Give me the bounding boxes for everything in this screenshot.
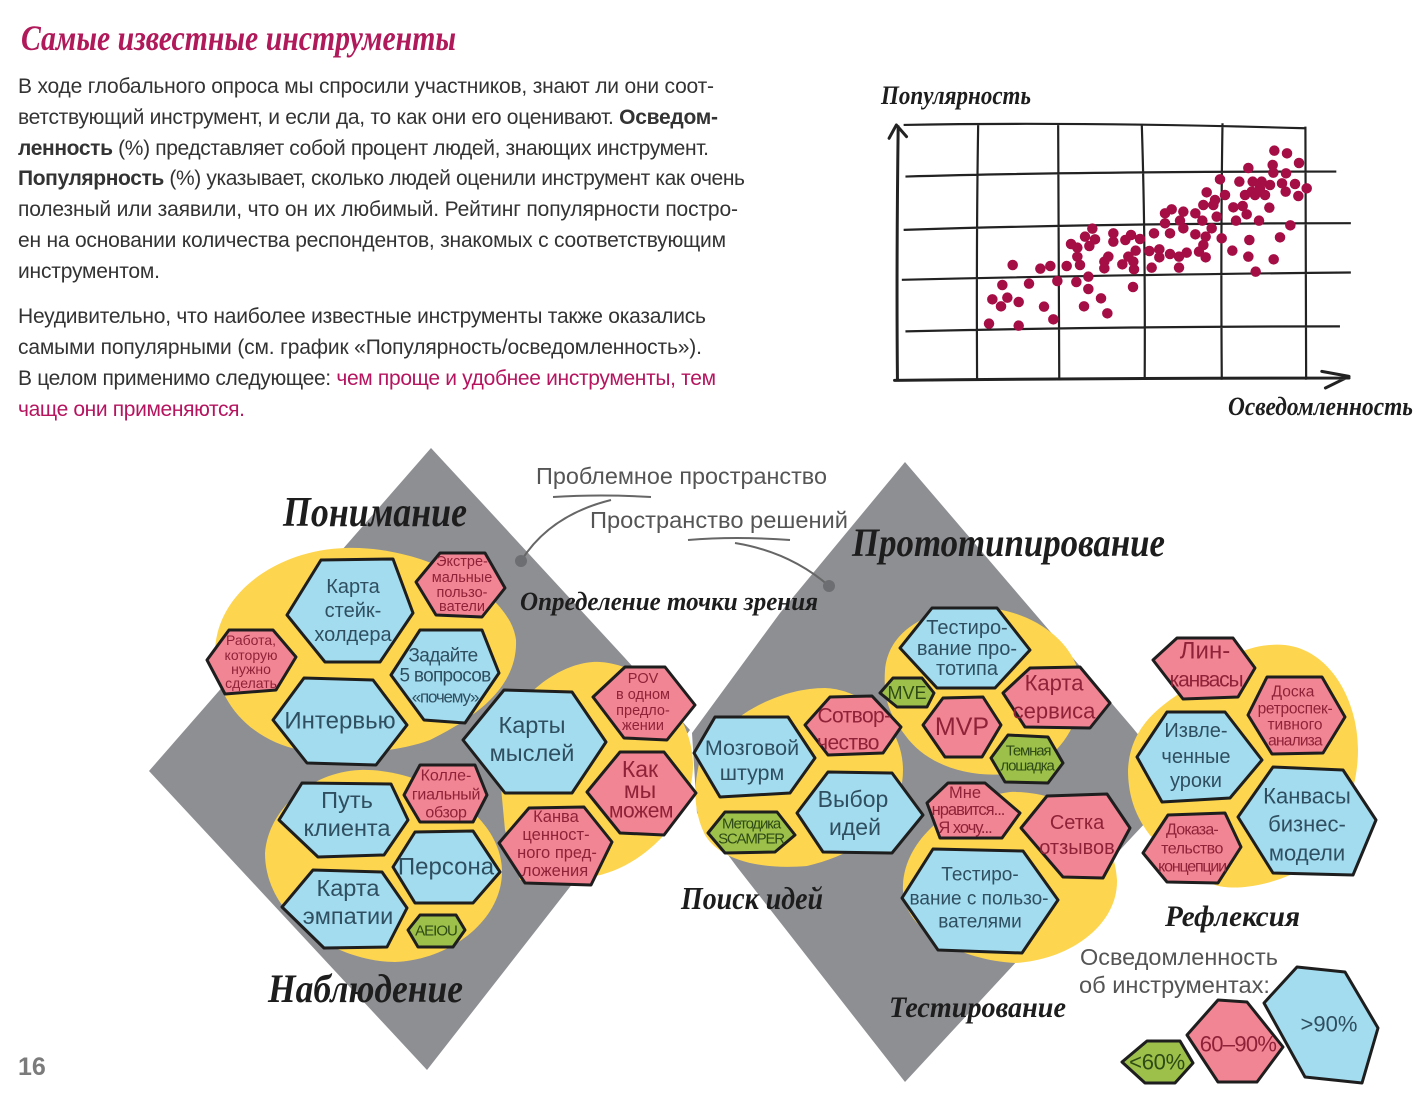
hex: interview [273,678,407,765]
hex: lean canvas [1153,638,1255,699]
hex: co-creation: Сотвор- [817,704,891,728]
legend title [1079,944,1278,998]
hex: feedback grid: Сетка [1050,812,1105,834]
hex: jobs to be done: нужно [231,661,271,677]
hex: peer review: Колле- [421,768,471,784]
hex: user testing: Тестиро- [941,864,1019,886]
annotation: solution space [590,507,848,592]
hex: idea selection: идей [829,814,881,840]
heading: reflection: Рефлексия [1164,900,1300,933]
hex: how might we: мы [624,777,656,803]
hex: empathy map: эмпатии [303,903,393,929]
hex: lessons learned: уроки [1170,770,1222,792]
hex: five whys: 5 вопросов [399,666,491,686]
hex: dark horse: лошадка [1000,758,1055,774]
heading: ideation: Поиск идей [680,880,823,916]
hex: user testing: вание с пользо- [910,888,1048,910]
blob: reflection [1128,645,1358,888]
hex: MVP [923,697,1001,757]
panel: solution space diamond [692,462,1180,1082]
hex: retrospective board [1248,677,1345,754]
legend item: 60 to 90 percent: 60–90% [1200,1032,1276,1056]
hex: brainstorming: штурм [720,761,784,785]
legend title: об инструментах: [1079,972,1270,998]
hex: stakeholder map: Карта [326,576,381,598]
hex: user testing: вателями [938,912,1022,932]
hex: stakeholder map: стейк- [325,600,381,622]
chart axis label: awareness: Осведомленность [1228,392,1413,421]
hex: dark horse [991,735,1063,783]
hex: value proposition canvas [499,807,612,885]
hex: extreme users: мальные [432,570,492,586]
hex: empathy map [282,870,407,948]
hex: feedback grid [1021,794,1130,878]
hex: stakeholder map: холдера [314,624,392,646]
text block: conclusion paragraph: В целом применимо следующее: чем проще и удобнее инструменты, тем [18,367,716,390]
hex: business model canvas [1238,767,1376,875]
hex: five whys: «почему» [412,688,479,706]
hex: lean canvas: канвасы [1170,668,1242,692]
hex: jobs to be done: которую [225,647,277,663]
hex: co-creation: чество [817,732,879,754]
heading: prototyping: Прототипирование [851,520,1165,565]
hex: value proposition canvas: ценност- [522,826,590,844]
hex: business model canvas: модели [1269,840,1345,866]
hex: AEIOU [408,915,465,947]
blob: understanding [215,548,516,753]
hex: co-creation [805,696,901,755]
text block: conclusion paragraph: Неудивительно, что наиболее известные инструменты также оказались [18,305,706,328]
hex: user testing [902,849,1058,953]
hex: POV [593,667,695,740]
text block: conclusion paragraph [18,305,716,421]
hex: service map: сервиса [1013,698,1096,724]
text block: intro paragraph: ен на основании количества респондентов, знакомых с соответствующим [18,229,726,252]
heading: testing: Тестирование [889,991,1066,1024]
hex: lean canvas: Лин- [1180,638,1230,664]
hex: I like I wish: Я хочу... [938,819,992,837]
heading: understanding: Понимание [282,490,467,536]
text block: intro paragraph: В ходе глобального опроса мы спросили участников, знают ли они соот- [18,75,714,98]
hex: extreme users: ватели [439,599,485,615]
hex: lessons learned: Извле- [1164,720,1228,742]
text block: intro paragraph [18,75,745,283]
hex: mind maps [463,690,606,793]
hex: five whys [391,630,499,723]
hex: how might we: можем [609,800,673,822]
hex: proof of concept [1143,813,1241,883]
hex: extreme users: Экстре- [436,554,488,570]
hex: MVP: MVP [935,713,989,741]
hex: MVE: MVE [887,683,927,703]
hex: stakeholder map [287,559,413,662]
hex: SCAMPER [708,812,795,853]
legend item: 60 to 90 percent [1187,1000,1283,1082]
hex: how might we: Как [622,756,659,782]
hex: peer review: гиальный [412,786,480,804]
heading: observation: Наблюдение [267,966,463,1011]
hex: customer journey [279,783,408,857]
legend [1079,944,1378,1083]
heading: define point of view: Определение точки зрения [520,587,818,616]
hex: retrospective board: Доска [1272,684,1315,700]
hex: AEIOU: AEIOU [415,922,457,940]
hex: I like I wish: Мне [949,784,981,802]
hex: service map [1003,667,1110,728]
annotation: solution space: Пространство решений [590,507,848,533]
hex: retrospective board: тивного [1267,716,1323,734]
hex: how might we [587,752,696,835]
hex: POV: в одном [616,687,670,703]
hex: prototype testing: Тестиро- [926,617,1008,639]
hex: jobs to be done [207,630,296,694]
hex: proof of concept: концепции [1158,858,1226,876]
hex: five whys: Задайте [408,646,478,666]
hex: POV: жении [622,718,664,734]
hex: peer review [404,765,487,822]
hex: extreme users: пользо- [436,585,488,601]
hex: retrospective board: анализа [1268,732,1323,750]
hex: feedback grid: отзывов [1039,837,1115,859]
hex: SCAMPER: SCAMPER [718,830,785,848]
hex: persona: Персона [398,854,495,880]
text block: intro paragraph: ленность (%) представляет собой процент людей, знающих инструмент. [18,137,709,160]
blob: prototyping [885,608,1081,775]
blob: ideation [695,688,903,867]
hex: prototype testing: вание про- [917,638,1017,660]
hex: extreme users [416,553,505,617]
hex: value proposition canvas: ного пред- [517,844,597,862]
legend item: above 90 percent [1264,967,1378,1083]
hex: brainstorming [694,717,815,797]
hex: value proposition canvas: Канва [533,808,580,826]
hex: jobs to be done: сделать [225,675,277,691]
annotation: problem space [515,463,827,567]
hex: lessons learned: ченные [1161,746,1231,768]
hex: MVE [880,678,934,707]
legend item: above 90 percent: >90% [1301,1012,1357,1036]
page number: 16 [18,1053,46,1081]
chart data points [989,151,1307,326]
hex: empathy map: Карта [317,875,380,901]
text block: conclusion paragraph: самыми популярными (см. график «Популярность/осведомленность»). [18,336,702,359]
hex: customer journey: клиента [303,815,391,841]
hex: idea selection: Выбор [818,786,888,812]
hex: POV: предло- [616,703,670,719]
chart grid [902,123,1351,380]
annotation: problem space: Проблемное пространство [536,463,827,489]
hex: prototype testing [900,608,1030,688]
hex: value proposition canvas: ложения [522,862,588,880]
text block: intro paragraph: полезный или заявили, что он их любимый. Рейтинг популярности постро- [18,198,738,221]
text block: intro paragraph: Популярность (%) указывает, сколько людей оценили инструмент как очень [18,167,745,190]
hex: jobs to be done: Работа, [226,632,276,648]
hex: POV: POV [628,671,659,687]
hex: interview: Интервью [284,708,396,734]
blob: testing [903,792,1117,963]
hex: peer review: обзор [425,804,467,822]
hex: customer journey: Путь [321,787,373,813]
blob: observation [265,770,502,962]
text block: conclusion paragraph: чаще они применяются. [18,398,245,421]
text block: intro paragraph: ветствующий инструмент, и если да, то как они его оценивают. Осведом- [18,106,718,129]
hex: SCAMPER: Методика [722,816,782,832]
chart: popularity vs awareness scatter [880,81,1413,421]
hex: mind maps: Карты [499,712,565,738]
hex: service map: Карта [1025,670,1084,696]
hex: I like I wish: нравится... [932,801,1005,819]
hex: proof of concept: тельство [1161,840,1223,858]
legend title: Осведомленность [1080,944,1278,970]
title: Самые известные инструменты [21,18,456,58]
hex: I like I wish [927,783,1020,838]
hex: business model canvas: бизнес- [1268,812,1346,836]
text block: intro paragraph: инструментом. [18,260,160,283]
chart axis label: popularity: Популярность [880,81,1031,110]
hex: idea selection [797,772,923,853]
panel: problem space diamond [149,448,690,1070]
hex: prototype testing: тотипа [936,658,999,680]
hex: lessons learned [1137,712,1262,802]
hex: persona [393,831,500,903]
hex: business model canvas: Канвасы [1263,784,1351,808]
hex: brainstorming: Мозговой [705,736,799,760]
hex: proof of concept: Доказа- [1166,822,1218,838]
blob: point of view [497,662,693,880]
hex: mind maps: мыслей [490,740,574,766]
hex: dark horse: Темная [1006,742,1051,760]
legend item: below 60 percent [1122,1041,1193,1083]
chart axes with arrows [889,125,1349,388]
hex: retrospective board: ретроспек- [1258,700,1333,718]
legend item: below 60 percent: <60% [1129,1050,1185,1074]
